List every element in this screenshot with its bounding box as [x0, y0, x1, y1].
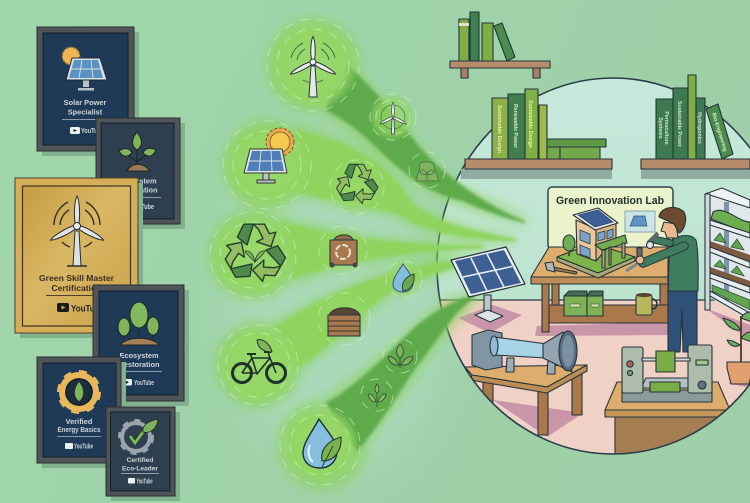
- book: Sustainable Design 2: [525, 89, 538, 159]
- right wall shelf: [641, 75, 750, 179]
- stream: solar path: [283, 132, 515, 240]
- icon: wind turbine large: [289, 36, 337, 97]
- book: Sustainable Design 2: Sustainable Design: [527, 100, 533, 148]
- icon: lab solar panel: [451, 247, 525, 322]
- turbine icon: [49, 196, 105, 266]
- workbench: [531, 208, 668, 332]
- stream: water path: [327, 295, 475, 450]
- fabrication machine: [622, 345, 712, 402]
- badge: Verified Energy Basics: Energy Basics: [58, 425, 100, 434]
- icon: sprout three leaves: [388, 344, 413, 368]
- icon: seed bag: [416, 162, 439, 181]
- building model: [557, 208, 635, 278]
- whiteboard title: Green Innovation Lab: [556, 195, 664, 207]
- mug: [636, 293, 657, 315]
- icon: recycling large: [220, 224, 289, 285]
- plant icon: [119, 132, 156, 171]
- model tree: [563, 235, 575, 256]
- badge: Verified Energy Basics: Verified: [66, 417, 93, 426]
- YouTube label: YouTube: [71, 304, 104, 314]
- solar icon: [62, 47, 107, 90]
- badge: Solar Power Specialist: Specialist: [68, 108, 103, 116]
- icon: compost bin: [330, 235, 358, 268]
- lab floor: [430, 300, 750, 460]
- icon: bicycle with leaf: [232, 340, 286, 382]
- book: Permaculture Systems: Permaculture: [663, 111, 669, 145]
- scientist: [626, 207, 698, 352]
- badge: Ecosystem Restoration: Ecosystem: [119, 351, 159, 360]
- book: Renewable Power: [508, 94, 525, 159]
- badge: Certified Eco-Leader: Eco-Leader: [122, 466, 158, 472]
- YouTube label: YouTube: [74, 444, 93, 450]
- storage boxes: [564, 291, 603, 316]
- YouTube label: YouTube: [81, 128, 104, 135]
- hand tools: [626, 233, 658, 271]
- icon: recycling small: [333, 164, 380, 206]
- badge: Verified Energy Basics: [37, 357, 126, 468]
- stream glows: [211, 21, 527, 487]
- badge: Green Skill Master Certification: Green Skill Master: [39, 273, 115, 283]
- icon: water drop large: [303, 419, 341, 468]
- badge: Ecosystem Restoration small: Restoration: [116, 186, 158, 194]
- gear icon: [61, 374, 97, 410]
- book: Sustainable Design: [492, 98, 508, 159]
- whiteboard: [548, 187, 673, 249]
- stream: recycling path: [283, 223, 483, 277]
- badge title: Solar Power: [64, 98, 106, 107]
- trees icon: [118, 302, 160, 345]
- YouTube label: YouTube: [134, 380, 154, 387]
- icon: solar panel with sun: [244, 128, 294, 183]
- potted plant: [723, 312, 750, 384]
- icon: wooden crate: [328, 308, 360, 336]
- icon: wind turbine small: [379, 102, 407, 134]
- book: Hydroponics: Hydroponics: [696, 112, 702, 144]
- badge: Ecosystem Restoration: [93, 285, 189, 406]
- badge: Ecosystem Restoration small: [96, 118, 185, 229]
- wind tunnel: [472, 330, 577, 374]
- stream: wind path: [327, 63, 525, 222]
- book: Permaculture Systems: [656, 99, 673, 159]
- vertical farm rack: [705, 188, 750, 320]
- book: Bio-Engineering: Bio-Engineering: [710, 112, 728, 152]
- YouTube label: [57, 303, 104, 314]
- badge: Ecosystem Restoration: Restoration: [118, 360, 160, 369]
- panel: knowledge streams: [209, 19, 527, 487]
- badge: Green Skill Master Certification: Certification: [51, 283, 102, 293]
- wind tunnel table: [465, 330, 587, 435]
- book: Renewable Power: Renewable Power: [512, 104, 518, 148]
- panel: certificate badges: [15, 27, 189, 501]
- left wall shelf: [461, 89, 612, 179]
- badge: Certified Eco-Leader: Certified: [127, 457, 153, 464]
- hammer: [545, 262, 577, 274]
- dashed rings: [210, 19, 445, 485]
- floor shadows: [458, 305, 750, 437]
- stream: bicycle path: [277, 262, 460, 367]
- panel: green innovation lab scene: [430, 70, 750, 460]
- icon: water drop small: [393, 264, 414, 292]
- icon: sprout small: [368, 384, 386, 407]
- fabrication machine table: [605, 345, 730, 460]
- YouTube label: YouTube: [136, 478, 153, 486]
- soft pale haze behind the streams: [230, 130, 450, 470]
- YouTube label: YouTube: [131, 204, 154, 211]
- glow discs: [209, 19, 424, 485]
- gear check icon: [121, 419, 158, 452]
- badge: Solar Power Specialist: [37, 27, 139, 156]
- book: Sustainable Design: Sustainable Design: [496, 105, 502, 153]
- badge: Ecosystem Restoration small: Ecosystem: [117, 176, 157, 186]
- badge: Certified Eco-Leader: [106, 407, 180, 501]
- book: Sustainable Power: Sustainable Power: [676, 101, 682, 147]
- lab wall: [430, 70, 750, 301]
- top wall shelf: [450, 12, 550, 78]
- pinned solar sketch: [625, 211, 655, 232]
- badge: Green Skill Master Certification: [15, 178, 143, 338]
- lab circle outline: [437, 78, 750, 454]
- book: Permaculture Systems: Systems: [657, 117, 663, 139]
